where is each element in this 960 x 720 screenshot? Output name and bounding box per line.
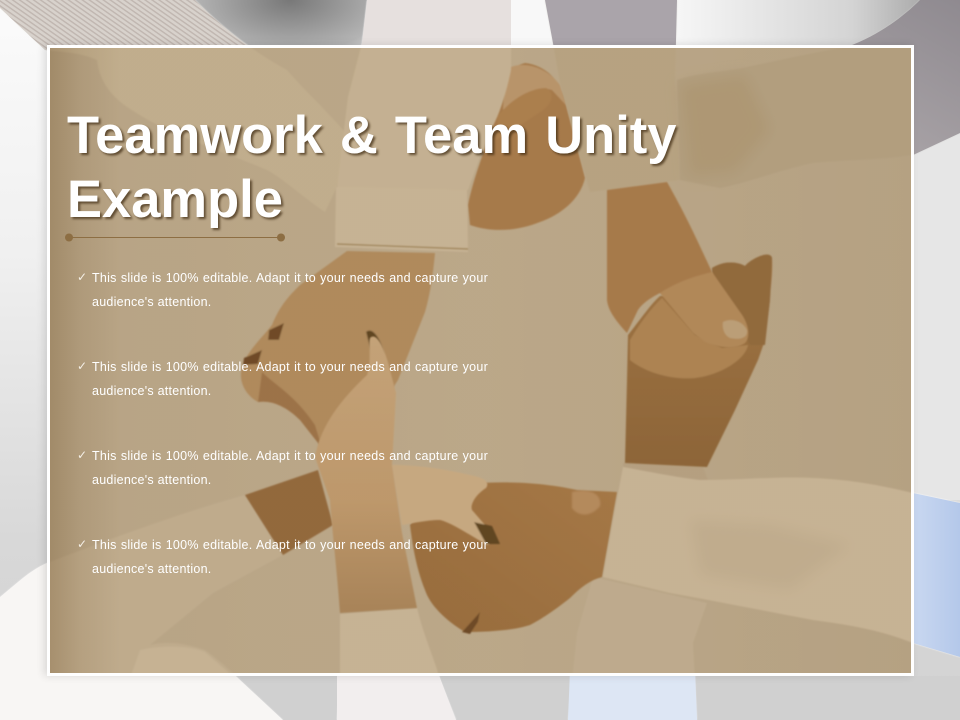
hand: freckled hand from top cuff [241, 251, 435, 448]
sleeve: top centre-right speckled arm [545, 0, 680, 192]
bullet 1: This slide is 100% editable. Adapt it to your needs and capture your audience's attention. [92, 271, 488, 309]
title: Teamwork & Team Unity Example [67, 106, 676, 228]
panel: tinted framed overlay [47, 45, 914, 676]
hand: gripped hand and vertical forearm [625, 255, 772, 467]
sleeve: top-left striped arm [0, 0, 348, 212]
sleeve: bottom centre white cuff [337, 608, 456, 720]
sleeve: lower right pale arm [568, 577, 707, 720]
arm: woman's vertical forearm and hand [315, 337, 500, 613]
forearm: dark forearm from left [245, 470, 333, 555]
bullet 2: This slide is 100% editable. Adapt it to your needs and capture your audience's attention. [92, 360, 488, 398]
sleeve: right white arm [603, 462, 960, 657]
divider with end dots [65, 234, 285, 242]
hand: man's hand and thumb [607, 182, 748, 347]
sleeve: top centre arm with cuff [335, 0, 511, 252]
bullet 4: This slide is 100% editable. Adapt it to your needs and capture your audience's attention. [92, 538, 488, 576]
bullet 3: ✓ [77, 448, 87, 462]
bullet 4: ✓ [77, 537, 87, 551]
sleeve: bottom-left white arm [0, 495, 283, 720]
hand: dark hand in centre [410, 482, 617, 634]
hand: top centre gripping hand [468, 63, 585, 230]
bullet 1: ✓ [77, 270, 87, 284]
bullet 2: ✓ [77, 359, 87, 373]
sleeve: top-right speckled arm [677, 0, 960, 188]
bullet 3: This slide is 100% editable. Adapt it to your needs and capture your audience's attention. [92, 449, 488, 487]
